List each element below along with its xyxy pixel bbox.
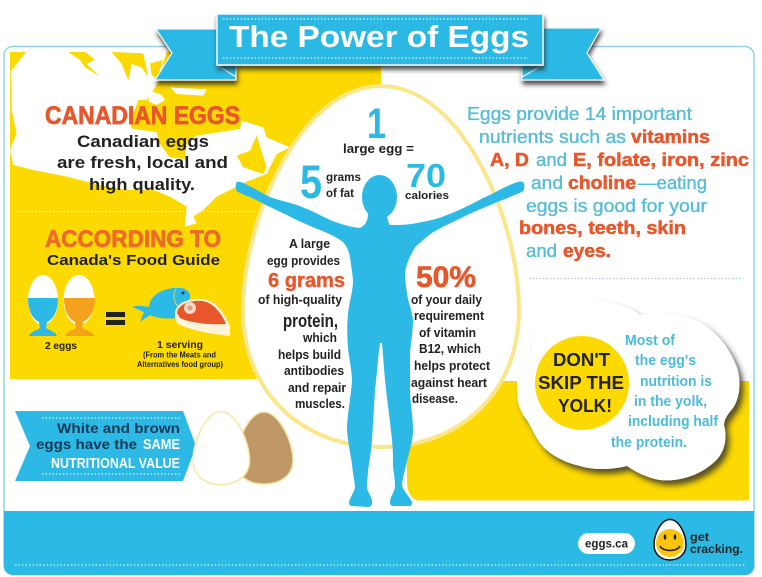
text: protein: egg provides [267,254,340,268]
icon: equals sign [106,312,125,325]
text: protein: A large [289,237,330,251]
banner: white and brown eggs: NUTRITIONAL VALUE [51,456,180,472]
text: vitamin B12: against heart [411,376,488,390]
stat: 70 calories: calories [405,190,449,202]
icon: white egg [193,412,250,484]
text: Canadian eggs description: high quality. [89,176,195,194]
text: nutrients: Eggs provide 14 important [467,104,692,124]
banner: white and brown eggs: White and brown [57,420,180,436]
dotted divider left [18,210,255,212]
text: Canadian eggs description: are fresh, local and [57,154,228,172]
dotted divider right [529,278,743,280]
text: nutrients: —eating [638,173,707,193]
logo: get cracking: cracking. [690,542,743,556]
panel: left yellow background [10,52,381,379]
figure: human silhouette [236,175,524,507]
text: nutrients: and [526,241,557,261]
text: nutrients: and [536,150,567,170]
text: nutrients: E, folate, iron, zinc [573,150,749,170]
text: protein: and repair [288,381,346,395]
text: protein: which [302,331,337,345]
text: protein: of high-quality [258,293,342,307]
title banner [217,14,543,65]
text: nutrients: and [531,173,563,193]
title ribbon left tail [155,29,236,80]
stat: 1 large egg: large egg = [343,142,414,156]
text: vitamin B12: of vitamin [419,326,476,340]
text: vitamin B12: disease. [412,392,458,406]
subheading: Canada's Food Guide: Canada's Food Guide [47,253,220,269]
title: The Power of Eggs [229,19,529,54]
badge: eggs.ca: eggs.ca [585,538,629,550]
title ribbon right tail [522,28,604,80]
text: vitamin B12: B12, which [419,342,481,356]
text: yolk nutrition: including half [628,413,719,430]
badge: eggs.ca [578,533,635,554]
text: nutrients: choline [568,173,636,193]
badge: don't skip the yolk: YOLK! [558,396,612,416]
text: vitamin B12: helps protect [414,359,491,373]
icon: steak [175,299,230,336]
dotted divider footer [15,564,745,566]
logo: get cracking: get [690,530,709,544]
text: yolk nutrition [611,332,719,451]
text: vitamin B12: of your daily [411,293,482,307]
text: nutrients: bones, teeth, skin [519,218,686,238]
stat: 70 calories: 70 [406,157,446,194]
banner: white and brown eggs [15,411,196,481]
stat: 1 large egg [343,100,414,156]
stat: 5 grams of fat: grams [326,170,361,184]
badge: don't skip the yolk: SKIP THE [538,373,624,393]
panel: right yellow background [407,381,749,500]
text: nutrients [467,104,749,261]
icon: blue egg cup [28,275,58,336]
stat: 5 grams of fat [300,155,361,208]
text: protein: antibodies [284,364,344,378]
footer band [4,511,754,575]
text: nutrients: A, D [490,150,529,170]
text: nutrients: eggs is good for your [526,196,707,216]
label: 1 serving [137,339,223,369]
text: yolk nutrition: Most of [625,332,676,349]
label: 1 serving: (From the Meats and [143,350,216,360]
logo: get cracking [654,520,743,560]
heading: According to: ACCORDING TO [45,226,221,253]
label: 1 serving: 1 serving [157,339,203,351]
text: nutrients: eyes. [563,241,611,261]
label: 2 eggs: 2 eggs [45,340,77,352]
text: Canadian eggs description: Canadian eggs [77,133,209,151]
banner: white and brown eggs: eggs have the [36,436,137,452]
banner: white and brown eggs: SAME [143,437,180,453]
text: vitamin B12: requirement [414,309,485,323]
text: Canadian eggs description [57,133,228,194]
text: vitamin B12: 50% [416,261,476,294]
stat: 1 large egg: 1 [367,100,386,148]
badge: don't skip the yolk [535,336,629,430]
stat: 70 calories [405,157,449,202]
text: nutrients: vitamins [631,127,710,147]
label: 1 serving: Alternatives food group) [137,359,223,369]
text: nutrients: nutrients such as [479,127,626,147]
text: protein: protein, [283,311,338,331]
icon: brown egg [236,412,293,484]
text: protein: muscles. [295,397,345,411]
text: yolk nutrition: in the yolk, [634,393,707,410]
stat: 5 grams of fat: of fat [326,186,354,200]
text: protein: 6 grams [268,270,345,292]
icon: orange egg cup [64,275,95,336]
text: yolk nutrition: the protein. [611,434,687,451]
badge: don't skip the yolk: DON'T [553,350,610,370]
text: vitamin B12 [411,261,491,406]
callout: cloud [517,300,740,480]
text: yolk nutrition: the egg's [635,352,696,369]
text: yolk nutrition: nutrition is [640,373,712,390]
stat: 5 grams of fat: 5 [300,155,322,208]
map: North America [10,52,290,227]
text: protein: helps build [278,348,341,362]
text: protein [258,237,346,411]
heading: Canadian eggs: CANADIAN EGGS [45,102,240,130]
large central egg [243,86,519,447]
icon: fish [132,288,190,322]
